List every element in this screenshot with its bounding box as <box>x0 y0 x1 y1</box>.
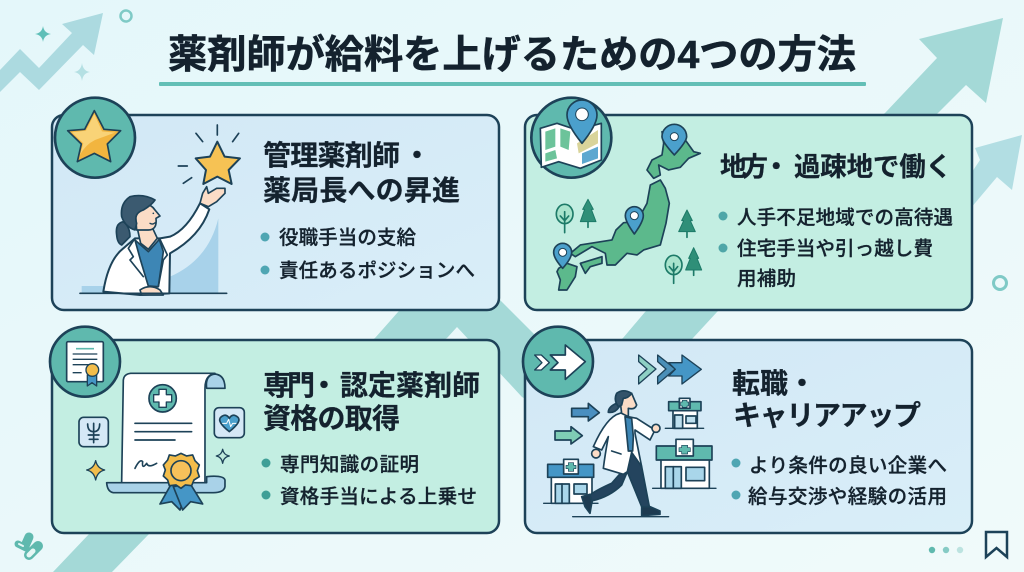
background growth arrow: top left <box>0 13 103 92</box>
heading: 資格の取得 <box>263 403 400 434</box>
heading: 過疎地で働く <box>794 152 952 182</box>
bullet list: 役職手当の支給 <box>279 227 416 249</box>
heading: ・ <box>763 152 790 182</box>
heading: 転職・ <box>732 368 816 399</box>
background growth arrow: right <box>960 135 1022 215</box>
bullet list <box>718 207 953 290</box>
icon: map badge <box>531 98 611 178</box>
pagination dots <box>929 547 963 553</box>
illustration: arrows and pharmacies <box>544 355 716 517</box>
title: 薬剤師が給料を上げるための4つの方法 <box>168 34 856 77</box>
heading <box>263 370 480 434</box>
heading: 地方 <box>720 152 768 182</box>
heading: ・ <box>403 140 431 171</box>
illustration: pharmacist running <box>555 391 660 516</box>
icon: capsules <box>18 537 38 555</box>
heading: 認定薬剤師 <box>340 370 480 401</box>
bullet list: 資格手当による上乗せ <box>280 486 477 508</box>
icon: arrow badge <box>523 327 593 397</box>
sparkle lower left <box>74 63 90 81</box>
illustration: star and rays <box>178 125 240 184</box>
heading: 薬局長への昇進 <box>263 175 460 206</box>
heading <box>263 140 460 206</box>
heading: 管理薬剤師 <box>263 140 400 171</box>
bullet list <box>732 455 947 508</box>
bullet list: より条件の良い企業へ <box>749 455 947 477</box>
panel: 転職・キャリアアップ <box>523 327 972 533</box>
panel: 管理薬剤師・薬局長への昇進 <box>52 98 499 310</box>
bullet list: 専門知識の証明 <box>280 454 419 476</box>
icon: star badge <box>55 98 135 178</box>
heading <box>720 152 952 182</box>
panel: 地方・過疎地で働く <box>525 98 972 310</box>
panel: 専門・認定薬剤師資格の取得 <box>50 327 499 533</box>
decorative ring right <box>994 276 1006 290</box>
heading: 専門 <box>263 370 315 401</box>
bullet list: 用補助 <box>737 268 796 290</box>
heading <box>732 368 921 431</box>
heading: キャリアアップ <box>733 400 921 431</box>
illustration: pharmacist reaching up <box>80 187 227 295</box>
illustration: map of Japan with pins and trees <box>554 124 702 290</box>
bullet list <box>262 454 477 508</box>
decorative ring top left <box>120 10 132 22</box>
heading: ・ <box>310 370 338 401</box>
bullet list: 給与交渉や経験の活用 <box>748 486 947 508</box>
bullet list: 責任あるポジションへ <box>279 260 475 282</box>
bullet list <box>260 227 475 282</box>
title underline <box>159 82 866 86</box>
bullet list: 住宅手当や引っ越し費 <box>737 238 933 260</box>
bullet list: 人手不足地域での高待遇 <box>737 207 953 229</box>
icon: certificate badge <box>50 327 120 397</box>
icon: bookmark <box>986 532 1007 557</box>
illustration: certificate <box>79 373 244 510</box>
sparkle top left <box>35 26 51 42</box>
